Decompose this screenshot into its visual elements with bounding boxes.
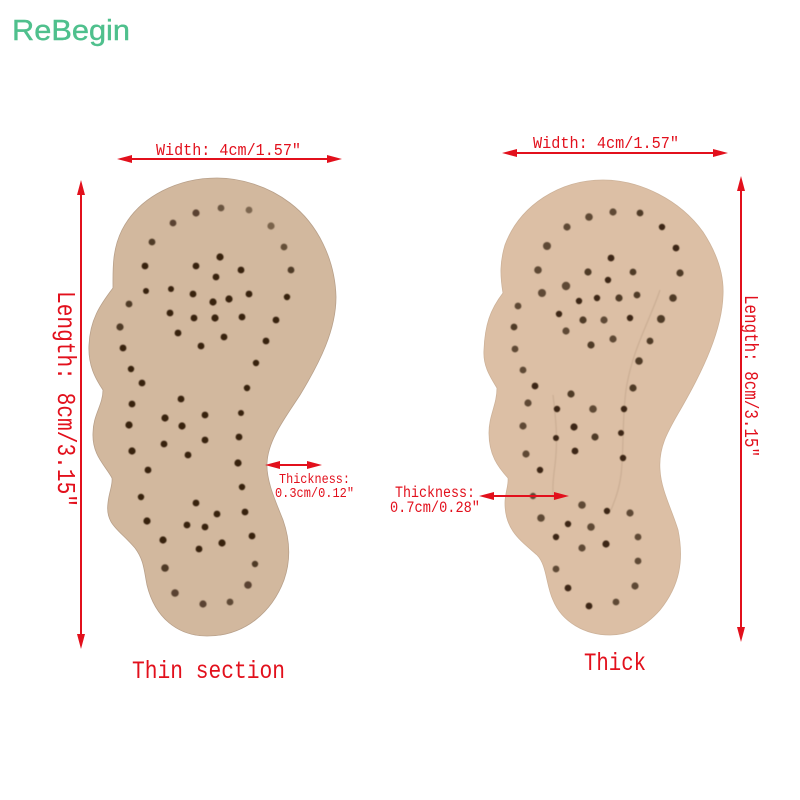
caption: thin section: Thin section [132, 657, 285, 686]
label: right thickness: 0.7cm/0.28" [390, 499, 480, 517]
arrow: left length [77, 180, 85, 649]
label: right width: Width: 4cm/1.57" [533, 135, 679, 154]
label: left width: Width: 4cm/1.57" [156, 142, 301, 161]
label: right length: Length: 8cm/3.15" [739, 295, 761, 457]
arrow: left thickness [265, 461, 322, 469]
caption: thick: Thick [584, 649, 646, 678]
label: right thickness [390, 484, 480, 517]
label: left thickness [275, 472, 354, 502]
brand logo: ReBegin [12, 15, 130, 47]
panel: thin insole [89, 178, 336, 636]
arrow: right length [737, 176, 745, 642]
label: left thickness: 0.3cm/0.12" [275, 486, 354, 502]
arrow: right thickness [479, 492, 569, 500]
panel: thick insole [484, 180, 723, 635]
arrow: right width [502, 149, 728, 157]
insole shape: thin [89, 178, 336, 636]
label: left length: Length: 8cm/3.15" [50, 291, 80, 507]
insole shape: thick [484, 180, 723, 635]
perforation holes: thick [511, 208, 684, 609]
perforation holes: thin [116, 205, 294, 608]
arch creases [553, 290, 660, 510]
label: left thickness: Thickness: [279, 472, 350, 488]
arrow: left width [117, 155, 342, 163]
label: right thickness: Thickness: [395, 484, 475, 502]
